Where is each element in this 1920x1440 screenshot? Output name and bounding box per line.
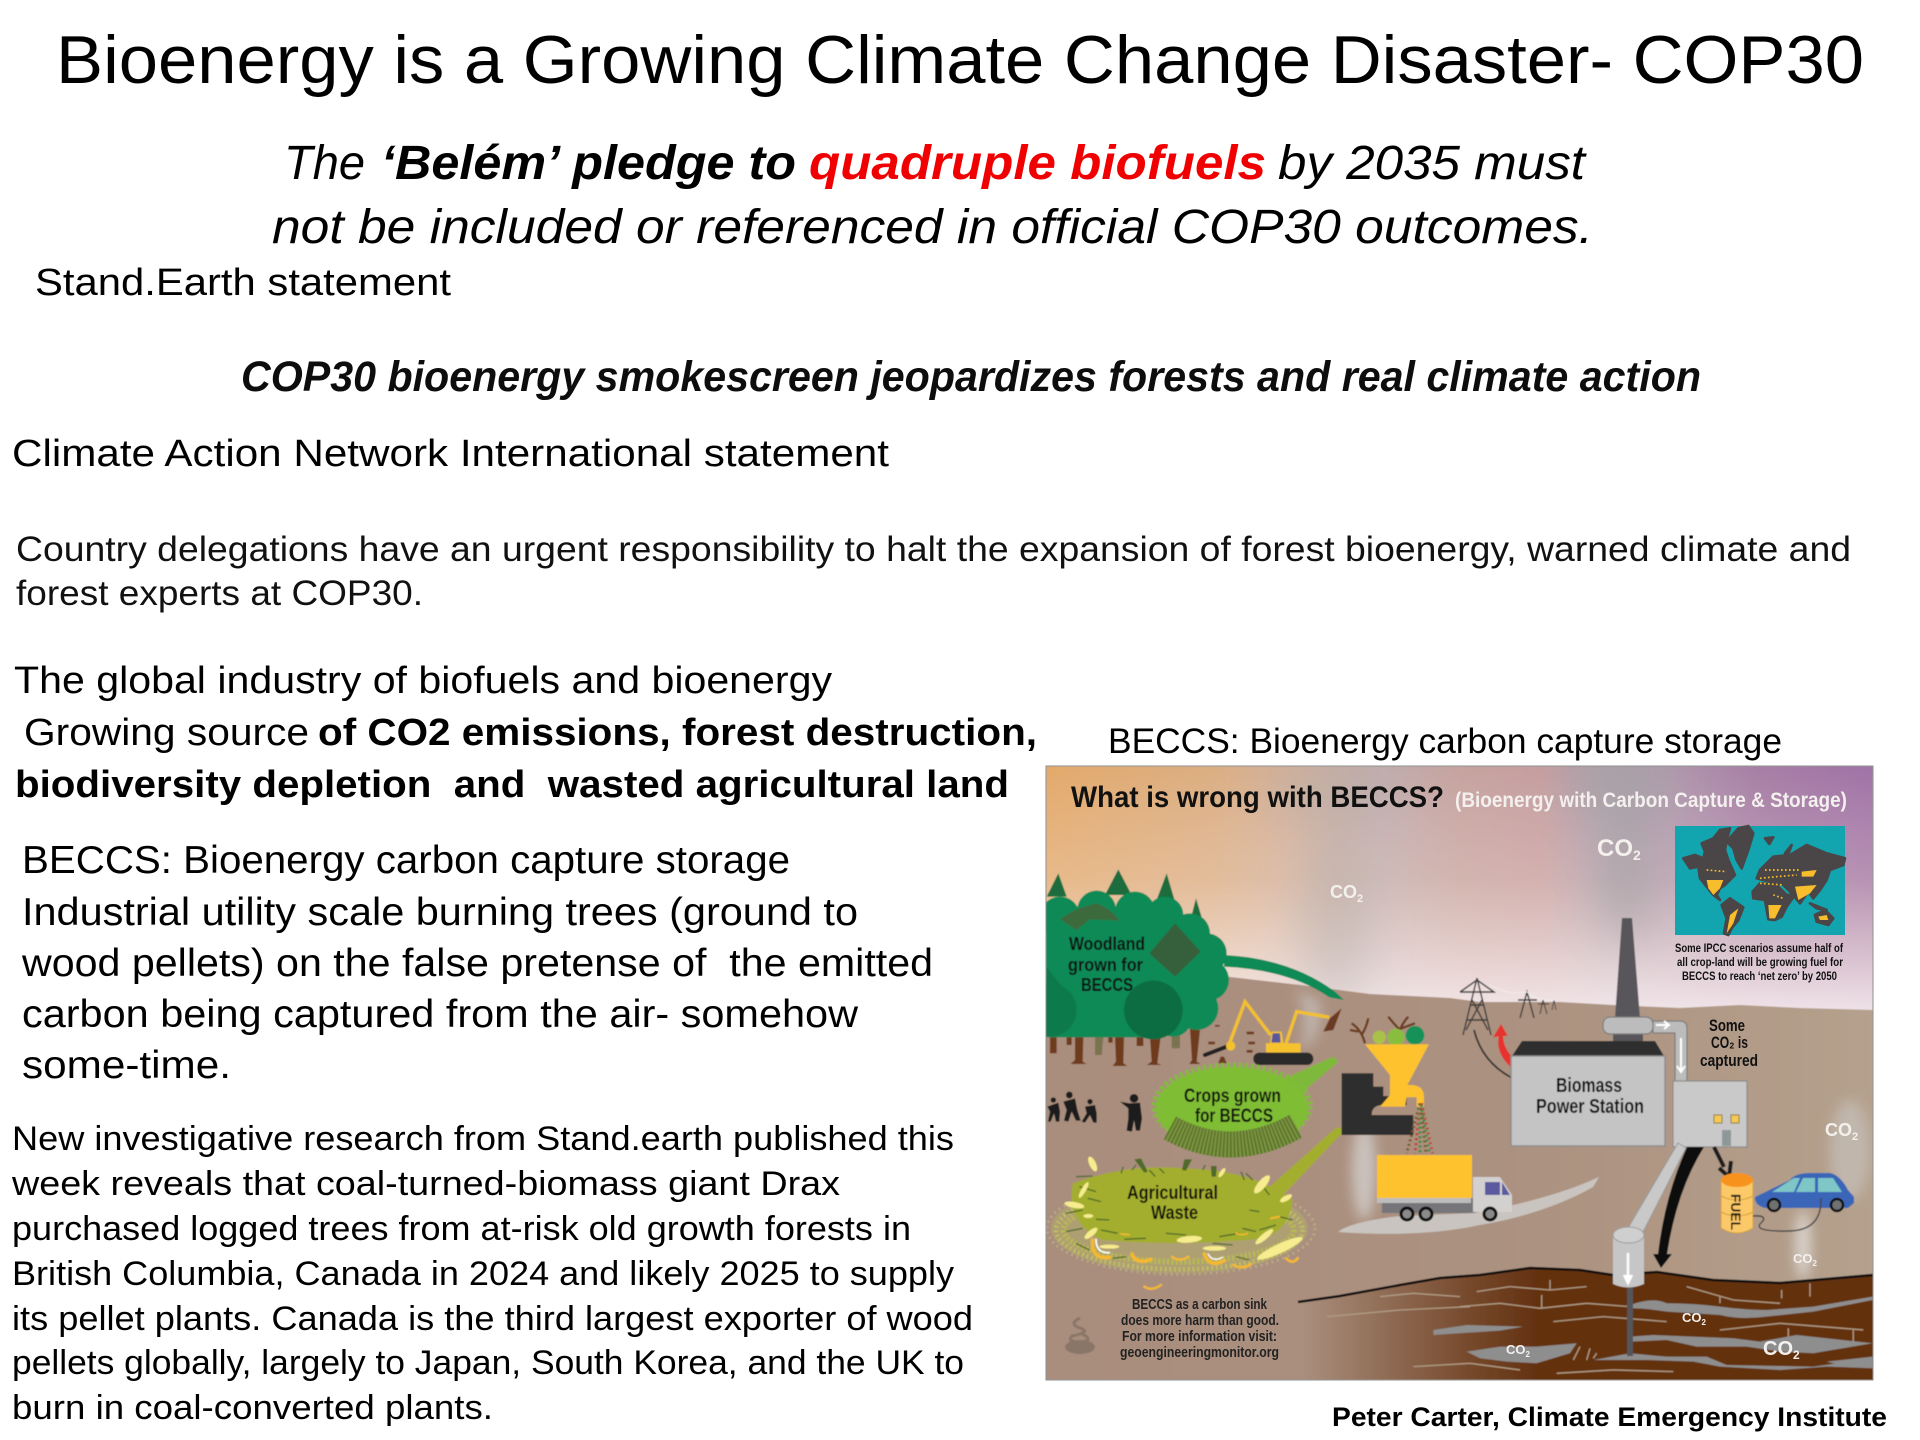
CO2 labels: 2 <box>1852 1131 1858 1143</box>
agricultural waste: Waste <box>1151 1203 1198 1224</box>
text block: global industry: biodiversity depletion and wasted agricultural land <box>15 764 1009 806</box>
text block: country delegations: Country delegations have an urgent responsibility to halt the expansion of forest bioenergy, warned climate and <box>16 530 1851 569</box>
CO2 labels: CO <box>1597 835 1633 862</box>
Belém pledge quote: by 2035 must <box>1278 137 1587 190</box>
credit: Peter Carter, Climate Emergency Institute <box>1332 1402 1887 1432</box>
car <box>1753 1173 1854 1231</box>
hopper with biomass <box>1342 1017 1429 1135</box>
CO2 labels: CO <box>1330 882 1357 902</box>
biomass chips stream <box>1407 1103 1433 1153</box>
CO2 labels: 2 <box>1812 1259 1818 1268</box>
biomass power station: Biomass <box>1556 1075 1622 1097</box>
map caption: BECCS to reach ‘net zero’ by 2050 <box>1682 971 1837 983</box>
text block: Stand.earth research <box>11 1120 973 1427</box>
infographic frame <box>1046 766 1873 1380</box>
infographic heading: (Bioenergy with Carbon Capture & Storage) <box>1455 789 1847 812</box>
text block: BECCS explanation: BECCS: Bioenergy carbon capture storage <box>22 839 790 882</box>
Belém pledge quote: ‘Belém’ pledge to <box>381 137 796 190</box>
crops grown for BECCS <box>1154 1057 1338 1149</box>
infographic heading <box>1071 781 1847 814</box>
ground <box>1046 977 1873 1380</box>
crops grown for BECCS: Crops grown <box>1184 1086 1281 1107</box>
CO2 labels: 2 <box>1702 1318 1706 1327</box>
CO2 labels: 2 <box>1633 847 1641 863</box>
fuel barrel <box>1721 1173 1753 1233</box>
infographic heading: What is wrong with BECCS? <box>1071 781 1444 814</box>
label: some CO2 is captured: captured <box>1700 1051 1758 1070</box>
arrow: to fuel <box>1714 1147 1731 1177</box>
text block: country delegations <box>16 530 1851 613</box>
Belém pledge quote <box>272 137 1593 254</box>
label: some CO2 is captured: Some <box>1709 1016 1745 1035</box>
world map inset <box>1675 826 1845 935</box>
infographic panel: What is wrong with BECCS: BECCS <box>1081 974 1133 995</box>
text block: Stand.earth research: its pellet plants. Canada is the third largest exporter of wood <box>12 1300 973 1338</box>
text block: BECCS explanation: carbon being captured from the air- somehow <box>22 993 859 1036</box>
smoke plumes <box>1296 990 1870 1280</box>
text block: Stand.earth research: British Columbia, Canada in 2024 and likely 2025 to supply <box>12 1255 954 1293</box>
Belém pledge quote: quadruple biofuels <box>809 137 1266 190</box>
note: carbon sink: geoengineeringmonitor.org <box>1120 1345 1279 1361</box>
excavator <box>1205 1002 1342 1065</box>
fuel barrel: FUEL <box>1728 1194 1744 1230</box>
CO2 labels: 2 <box>1793 1348 1800 1362</box>
sky background <box>1046 766 1872 1010</box>
note: carbon sink <box>1120 1297 1279 1361</box>
pylons <box>1460 978 1556 1035</box>
crops grown for BECCS: for BECCS <box>1195 1106 1273 1127</box>
text block: global industry: The global industry of biofuels and bioenergy <box>14 660 832 702</box>
road arrow <box>1338 1177 1599 1234</box>
text block: BECCS explanation: wood pellets) on the false pretense of the emitted <box>21 942 933 985</box>
source: Stand.Earth statement: Stand.Earth statement <box>35 262 451 304</box>
map caption: all crop-land will be growing fuel for <box>1677 957 1843 969</box>
infographic panel: What is wrong with BECCS: grown for <box>1068 954 1143 975</box>
text block: BECCS explanation: Industrial utility scale burning trees (ground to <box>22 891 858 934</box>
label: some CO2 is captured: CO₂ is <box>1711 1033 1748 1052</box>
tree canopy <box>1040 891 1229 1037</box>
Belém pledge quote: not be included or referenced in official COP30 outcomes. <box>272 201 1593 254</box>
chimney <box>1603 918 1687 1082</box>
pipeline and storage well <box>1613 1143 1686 1356</box>
infographic panel: What is wrong with BECCS: Woodland <box>1069 933 1145 954</box>
capture unit <box>1673 1081 1747 1147</box>
text block: Stand.earth research: pellets globally, largely to Japan, South Korea, and the UK to <box>12 1344 964 1382</box>
text block: global industry: of CO2 emissions, forest destruction, <box>318 712 1037 754</box>
infographic caption: BECCS: Bioenergy carbon capture storage <box>1108 722 1782 761</box>
woodland <box>1023 869 1344 1066</box>
note: carbon sink: BECCS as a carbon sink <box>1132 1297 1268 1313</box>
logo <box>1065 1318 1095 1354</box>
underground rock with CO2 seams <box>1298 1268 1873 1380</box>
people silhouettes <box>1047 1092 1142 1132</box>
label: some CO2 is captured <box>1700 1016 1758 1070</box>
subheading: COP30 smokescreen: COP30 bioenergy smokescreen jeopardizes forests and real climate action <box>241 353 1701 401</box>
CO2 labels: CO <box>1825 1120 1852 1140</box>
agricultural waste: Agricultural <box>1127 1183 1218 1204</box>
CO2 labels: CO <box>1682 1310 1702 1325</box>
map caption: Some IPCC scenarios assume half of <box>1675 943 1843 955</box>
arrow: carbon into ground <box>1653 1147 1704 1268</box>
text block: Stand.earth research: purchased logged trees from at-risk old growth forests in <box>12 1210 911 1248</box>
title: Bioenergy is a Growing Climate Change Disaster- COP30 <box>56 22 1864 98</box>
wire and red arrow <box>1474 1026 1512 1078</box>
source: Climate Action Network statement: Climate Action Network International statement <box>12 433 889 475</box>
CO2 labels: 2 <box>1526 1350 1530 1359</box>
text block: Stand.earth research: New investigative research from Stand.earth published this <box>12 1120 954 1158</box>
biomass power station: Power Station <box>1536 1096 1644 1118</box>
CO2 labels: CO <box>1793 1251 1812 1266</box>
note: carbon sink: For more information visit: <box>1122 1329 1277 1345</box>
CO2 labels: CO <box>1763 1338 1793 1360</box>
text block: global industry: Growing source <box>24 712 309 754</box>
truck <box>1377 1155 1512 1220</box>
Belém pledge quote: The <box>284 137 365 190</box>
text block: BECCS explanation: some-time. <box>22 1044 231 1087</box>
tree trunks <box>1050 1028 1201 1066</box>
agricultural waste <box>1047 1127 1343 1289</box>
note: carbon sink: does more harm than good. <box>1121 1313 1279 1329</box>
text block: Stand.earth research: week reveals that coal-turned-biomass giant Drax <box>11 1165 840 1203</box>
CO2 labels: 2 <box>1357 893 1363 905</box>
infographic panel: What is wrong with BECCS <box>1023 735 1873 1380</box>
arrow from woodland <box>1224 955 1344 1000</box>
biomass power station <box>1511 1041 1665 1146</box>
text block: global industry <box>14 660 1037 806</box>
map caption <box>1675 943 1843 983</box>
text block: BECCS explanation <box>21 839 933 1087</box>
pine trees <box>1046 869 1202 918</box>
CO2 labels: CO <box>1506 1342 1526 1357</box>
text block: country delegations: forest experts at COP30. <box>16 574 423 613</box>
CO2 labels <box>1330 835 1858 1362</box>
text block: Stand.earth research: burn in coal-converted plants. <box>12 1389 493 1427</box>
